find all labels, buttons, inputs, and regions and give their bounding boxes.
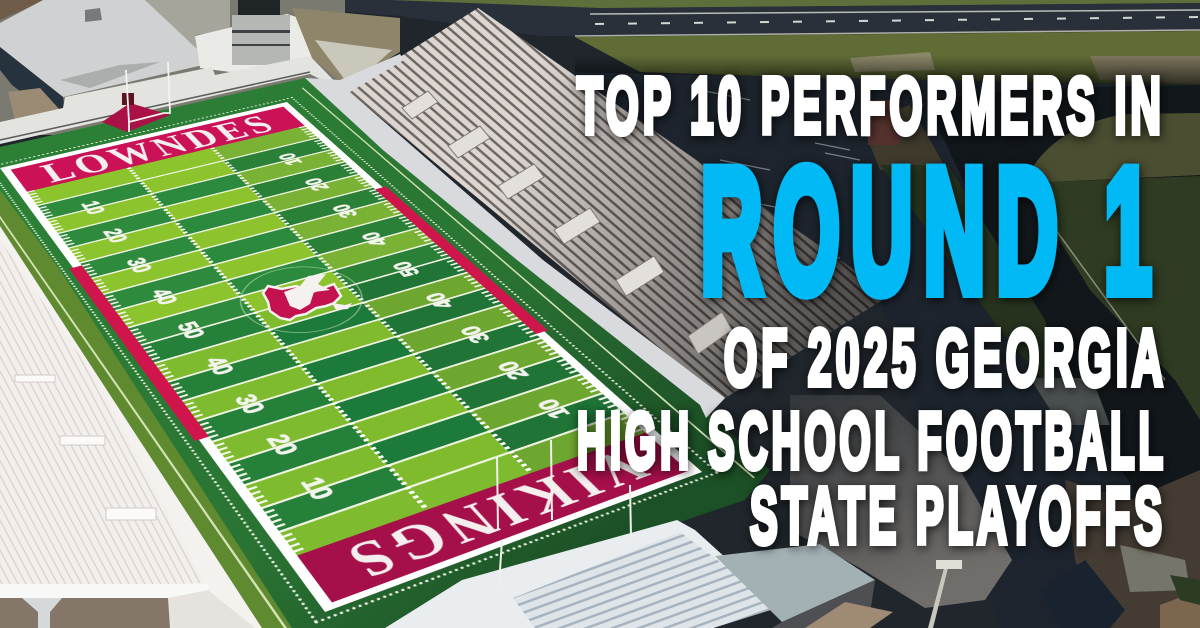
football field in perspective: 10 bbox=[294, 474, 339, 503]
football field in perspective: 30 bbox=[121, 255, 157, 275]
football field in perspective: 20 bbox=[260, 431, 304, 459]
yard numbers left bbox=[76, 199, 339, 503]
midfield circle bbox=[220, 256, 385, 346]
running track and infield bbox=[860, 85, 1200, 500]
football field in perspective: 40 bbox=[145, 286, 183, 307]
left visitor stands bbox=[0, 226, 262, 628]
football field in perspective: 50 bbox=[388, 259, 426, 279]
main home stands bbox=[305, 8, 890, 418]
football field in perspective: 20 bbox=[97, 226, 133, 245]
headline bbox=[577, 61, 1167, 560]
outer dotted boundary bbox=[0, 97, 719, 624]
turf stripes bbox=[12, 106, 688, 602]
football field in perspective: 20 bbox=[300, 176, 334, 193]
football field in perspective: 40 bbox=[420, 290, 460, 311]
yard numbers right bbox=[274, 151, 576, 421]
stand portals bbox=[402, 91, 732, 354]
endzone: Vikings: VIKINGS bbox=[329, 441, 662, 592]
grass surround bbox=[0, 78, 770, 628]
football field in perspective: 50 bbox=[171, 319, 210, 342]
football field in perspective: 10 bbox=[532, 396, 576, 421]
outer sideline markings bbox=[0, 88, 755, 628]
football field in perspective: 40 bbox=[199, 354, 239, 378]
left stand portals bbox=[15, 375, 156, 520]
endzone: Lowndes: LOWNDES bbox=[34, 109, 285, 188]
parking lot markings bbox=[700, 90, 860, 312]
football field in perspective: 40 bbox=[357, 230, 393, 248]
football field in perspective: 30 bbox=[328, 202, 363, 220]
football field in perspective bbox=[0, 102, 702, 612]
football field in perspective: 10 bbox=[76, 199, 110, 217]
yard lines bbox=[27, 126, 643, 553]
football field in perspective: 30 bbox=[228, 391, 270, 417]
midfield Viking logo bbox=[263, 274, 352, 320]
top goalpost bbox=[102, 62, 170, 132]
football field in perspective: 30 bbox=[455, 323, 496, 346]
football field in perspective: 20 bbox=[492, 358, 535, 382]
sideline team strips bbox=[69, 186, 548, 441]
outer olive turf strip bbox=[0, 190, 292, 628]
top left building and scoreboard bbox=[0, 0, 400, 144]
lower stands and building bbox=[385, 520, 962, 628]
football field in perspective: 10 bbox=[274, 151, 307, 167]
bottom goalposts bbox=[497, 440, 631, 585]
lower right service area bbox=[790, 378, 1200, 628]
